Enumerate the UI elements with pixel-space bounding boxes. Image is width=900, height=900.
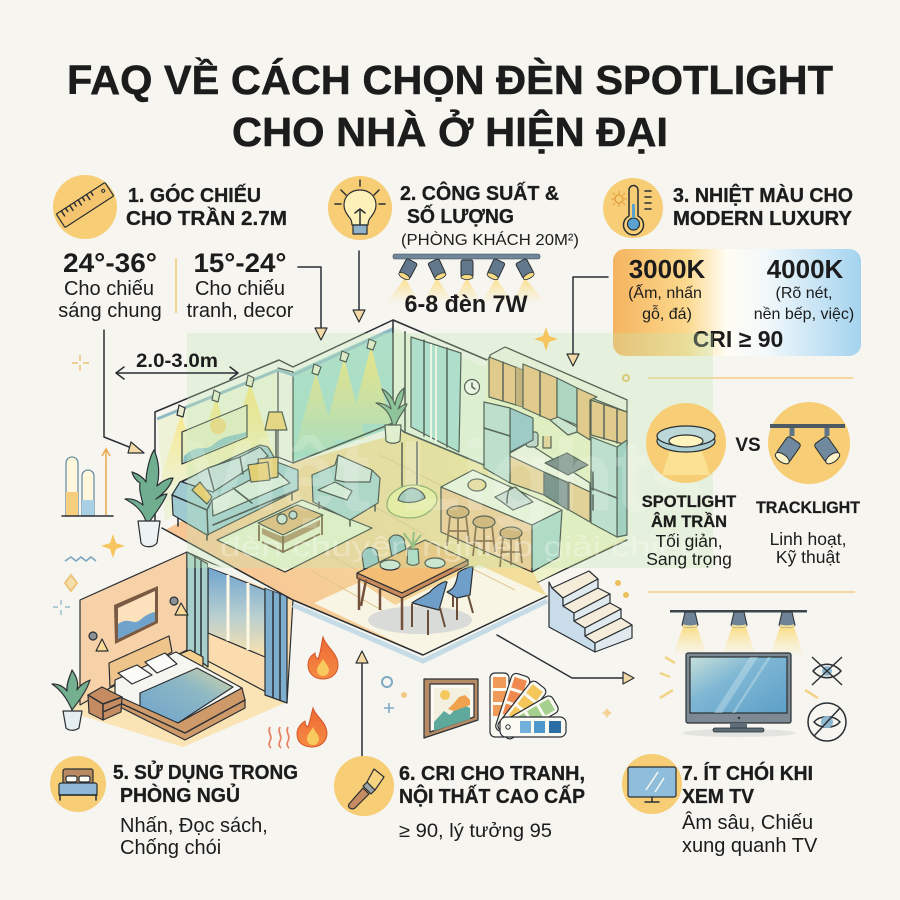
heading xyxy=(400,181,579,249)
icon: recessed spotlight xyxy=(646,403,726,483)
icon: monitor xyxy=(622,754,682,814)
text: xung quanh TV xyxy=(682,835,818,857)
icon: paint brush xyxy=(334,756,394,816)
left plant xyxy=(125,450,173,547)
icon: bed xyxy=(50,756,106,812)
heading: PHÒNG NGỦ xyxy=(120,783,240,807)
arrow: to left wall xyxy=(104,330,144,453)
dining table xyxy=(357,532,468,630)
heading: 3. NHIỆT MÀU CHO xyxy=(673,183,853,207)
heading xyxy=(399,763,585,808)
icon: light bulb xyxy=(328,176,392,240)
colour temperature card: 4000K xyxy=(767,254,844,284)
text: spotlight: ÂM TRẦN xyxy=(651,512,727,531)
text: Âm sâu, Chiếu xyxy=(682,811,813,834)
text: 24-36 degrees: 24°-36° xyxy=(63,248,157,278)
icon: flames xyxy=(269,637,338,748)
panel: 1 beam angle xyxy=(53,175,294,322)
heading: NỘI THẤT CAO CẤP xyxy=(399,784,585,808)
heading: 6. CRI CHO TRANH, xyxy=(399,763,585,785)
wall sconces xyxy=(89,597,188,651)
bedroom left wall xyxy=(80,552,187,705)
bedroom plant xyxy=(52,670,90,730)
text: spotlight xyxy=(642,493,736,569)
island with sink xyxy=(441,470,562,572)
heading: 2. CÔNG SUẤT & xyxy=(400,181,559,205)
watermark overlay: đèn chuyên nghiệp giải chiếu xyxy=(220,531,700,562)
watermark overlay: Việt Lights xyxy=(185,420,705,532)
label: 2.0-3.0m span xyxy=(116,351,238,379)
panel: 2 power and quantity xyxy=(328,176,579,318)
rug xyxy=(217,500,372,572)
text: Chống chói xyxy=(120,837,221,859)
heading: 5. SỬ DỤNG TRONG xyxy=(113,760,298,784)
heading: (PHÒNG KHÁCH 20M²) xyxy=(401,230,579,249)
bedroom floor xyxy=(73,650,285,747)
plant by window xyxy=(376,388,407,443)
colour temperature card xyxy=(613,249,861,356)
arrow: to track xyxy=(298,267,327,340)
wall painting xyxy=(114,586,158,644)
colour temperature card: (Rõ nét, xyxy=(776,285,832,302)
scene: open plan living and kitchen xyxy=(125,320,632,661)
fridges xyxy=(484,402,627,537)
icon: no glare xyxy=(812,657,842,685)
shadow below dining set xyxy=(368,606,472,634)
title: FAQ VỀ CÁCH CHỌN ĐÈN SPOTLIGHT xyxy=(67,57,833,103)
colour temperature card: nền bếp, việc) xyxy=(754,306,854,323)
arrow: to ceiling xyxy=(353,251,365,322)
heading: MODERN LUXURY xyxy=(673,208,853,230)
text: tracklight: Kỹ thuật xyxy=(776,547,840,567)
left wall with picture xyxy=(157,368,278,520)
icon: tracklight xyxy=(768,402,850,484)
dining chairs behind table xyxy=(362,535,407,569)
panel: TV with low glare xyxy=(660,610,846,741)
panel: 6 CRI for art xyxy=(334,756,585,842)
title xyxy=(67,57,833,155)
colour temperature card: CRI ≥ 90 xyxy=(693,326,783,352)
colour temperature card: gỗ, đá) xyxy=(642,304,692,323)
ceiling track outline xyxy=(155,320,627,522)
dining chairs in front xyxy=(412,567,473,635)
icon: colour swatches xyxy=(490,672,566,741)
text: tracklight xyxy=(756,499,860,567)
text: Nhấn, Đọc sách, xyxy=(120,815,268,837)
panel: 3 colour temperature xyxy=(603,178,861,356)
icon: framed painting xyxy=(424,679,478,738)
arrow: to TV xyxy=(497,635,634,684)
staircase xyxy=(549,571,632,652)
centre wall with wall washers xyxy=(278,327,393,463)
bedside table xyxy=(88,687,122,720)
glass door wall xyxy=(293,320,487,465)
text: VS: VS xyxy=(735,435,761,456)
heading: SỐ LƯỢNG xyxy=(407,204,514,228)
text xyxy=(120,815,268,859)
heading: CHO TRẦN 2.7M xyxy=(126,207,287,230)
heading: XEM TV xyxy=(682,786,755,808)
title: CHO NHÀ Ở HIỆN ĐẠI xyxy=(232,109,668,155)
decorative icons: height bars xyxy=(62,449,113,516)
decorative sparkles xyxy=(53,327,621,718)
heading xyxy=(126,183,287,230)
track light above TV xyxy=(660,610,818,698)
text: 15-24 degrees: 15°-24° xyxy=(194,248,286,278)
panel: 7 low glare TV xyxy=(622,754,818,857)
bar stools xyxy=(447,506,522,567)
text xyxy=(682,811,818,857)
heading: 1. GÓC CHIẾU xyxy=(128,183,261,207)
colour temperature card: (Ấm, nhấn xyxy=(628,283,702,302)
right bedside table xyxy=(177,650,203,672)
floor slab xyxy=(162,432,627,655)
text: tracklight: Linh hoạt, xyxy=(770,529,846,549)
text: 15-24 degrees: Cho chiếu xyxy=(195,278,285,300)
armchair xyxy=(312,455,380,526)
heading: 7. ÍT CHÓI KHI xyxy=(682,761,813,785)
panel: 5 bedroom use xyxy=(50,756,298,859)
text: 15-24 degrees xyxy=(187,248,294,322)
floor lamp xyxy=(265,412,287,457)
text: 24-36 degrees xyxy=(58,248,162,322)
text: 15-24 degrees: tranh, decor xyxy=(187,300,294,322)
text: 24-36 degrees: sáng chung xyxy=(58,300,162,322)
text: 24-36 degrees: Cho chiếu xyxy=(64,278,154,300)
television xyxy=(682,653,796,737)
watermark overlay xyxy=(185,333,713,568)
icon: thermometer xyxy=(603,178,663,238)
track light with five spots xyxy=(387,254,545,302)
icon: ruler xyxy=(53,175,117,239)
kitchen wall and cabinets xyxy=(484,347,627,582)
sofa xyxy=(172,445,298,540)
bedroom window wall xyxy=(187,552,293,703)
text: ≥ 90, lý tưởng 95 xyxy=(399,821,552,842)
heading xyxy=(113,760,298,807)
text: spotlight: SPOTLIGHT xyxy=(642,493,736,511)
bed xyxy=(109,636,245,740)
heading xyxy=(682,761,813,808)
text: spotlight: Sang trọng xyxy=(646,549,732,569)
panel: spotlight vs tracklight xyxy=(642,402,860,569)
arrow: to kitchen xyxy=(567,277,608,366)
wall clock xyxy=(464,380,480,394)
kitchen counter with stove and oven xyxy=(510,432,590,522)
pendant lamp xyxy=(387,442,437,518)
text: tracklight: TRACKLIGHT xyxy=(756,499,860,517)
label: 2.0-3.0m span: 2.0-3.0m xyxy=(136,351,218,372)
text: lamp quantity: 6-8 đèn 7W xyxy=(404,291,528,318)
scene: bedroom xyxy=(52,552,293,747)
coffee table xyxy=(258,505,323,553)
icon: eye slash xyxy=(808,703,846,741)
text: spotlight: Tối giản, xyxy=(655,531,723,551)
arrow: up to dining xyxy=(356,651,368,756)
colour temperature card: 3000K xyxy=(629,254,706,284)
heading xyxy=(673,183,853,230)
